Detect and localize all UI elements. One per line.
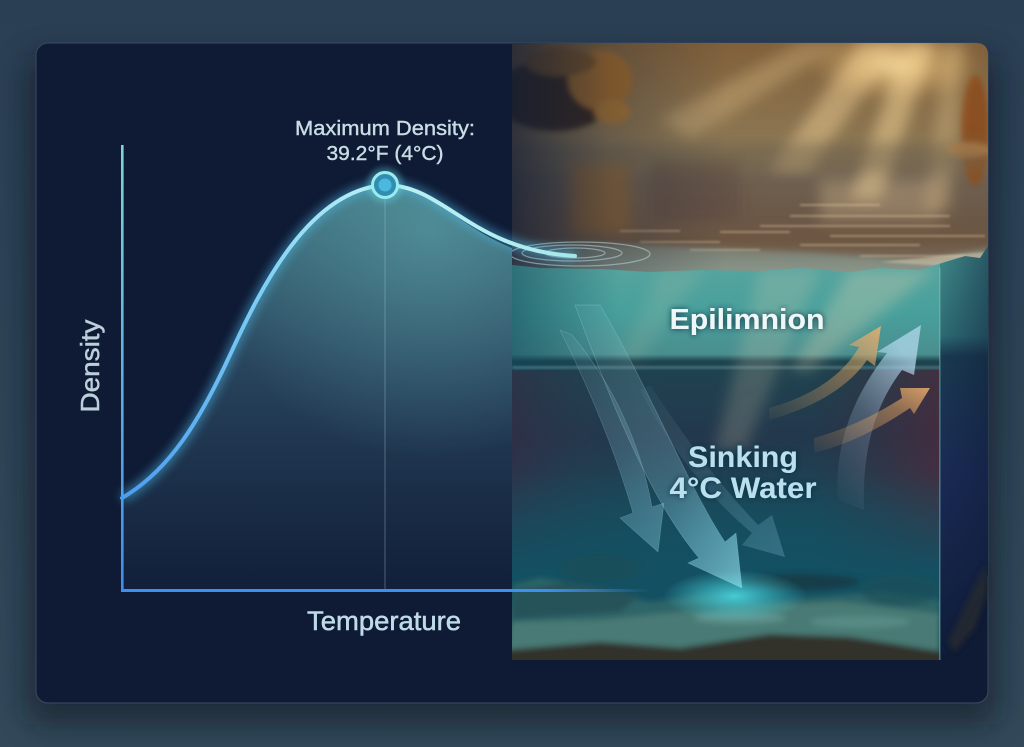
label: sinking 4°C water: 4°C Water: [670, 472, 817, 505]
y axis: [121, 145, 124, 592]
axis label: density: Density: [75, 319, 105, 413]
panel: side face of cross-section: [939, 244, 988, 660]
arrow: main sinking: [575, 305, 742, 588]
glow at lake bed: [668, 572, 802, 620]
area glow near the peak: [122, 185, 512, 590]
arrow: upper orange rising: [769, 326, 881, 420]
label: sinking 4°C water: [670, 441, 817, 505]
curve glow: [122, 185, 575, 498]
curve line: [122, 185, 575, 498]
arrow: small rear sinking: [640, 385, 785, 557]
autumn trees: [495, 48, 990, 185]
thermocline band: [512, 366, 940, 369]
underwater light beams: [620, 270, 935, 450]
chart: density curve: [121, 145, 651, 592]
water reflections: [570, 137, 988, 238]
arrows: rising water: [769, 325, 930, 510]
surface sheen near waterline: [515, 241, 986, 272]
label: epilimnion: Epilimnion: [670, 304, 824, 336]
label: sinking 4°C water: Sinking: [688, 441, 798, 474]
label: maximum density: Maximum Density:: [295, 117, 475, 140]
label: maximum density: 39.2°F (4°C): [326, 142, 444, 165]
ripple rings: [510, 242, 650, 266]
lake bed: [512, 562, 940, 660]
arrow: left sinking: [560, 330, 664, 552]
ripples: [620, 205, 985, 256]
area under curve: [122, 185, 512, 590]
panel: lake scene above water: [512, 43, 988, 272]
arrows: sinking water: [560, 305, 785, 588]
label: maximum density: [295, 117, 475, 165]
arrow: blue rising: [837, 325, 921, 510]
marker: maximum density point: [367, 167, 403, 203]
arrow: lower orange rising: [814, 388, 930, 453]
sun rays: [660, 29, 980, 210]
x axis: [121, 589, 651, 592]
axis label: temperature: Temperature: [307, 606, 461, 636]
maximum density guide line: [384, 190, 386, 590]
panel: lake cross-section underwater: [505, 255, 945, 665]
